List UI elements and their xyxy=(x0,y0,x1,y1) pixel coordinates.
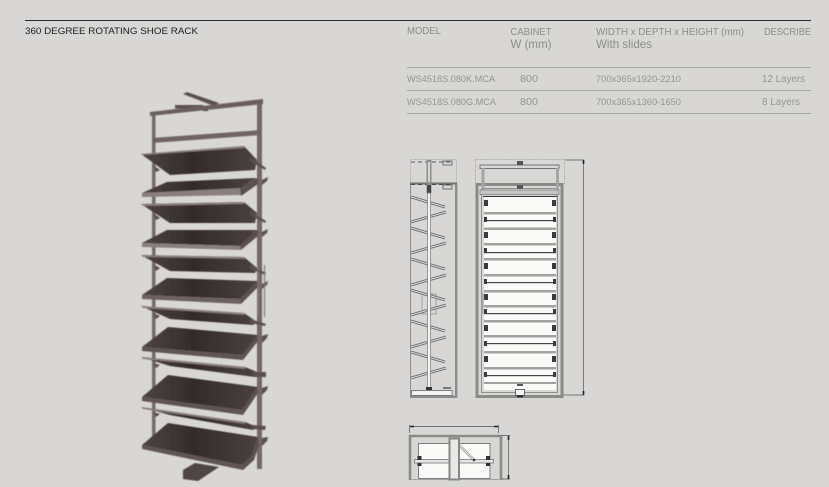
left pole xyxy=(152,113,156,450)
top frame xyxy=(480,161,559,196)
product illustration: rotating shoe rack xyxy=(141,92,268,481)
table row 2 xyxy=(407,97,800,108)
shelf arms xyxy=(411,197,446,378)
shelf 12 xyxy=(142,423,268,470)
table header: MODEL xyxy=(407,26,441,37)
base foot xyxy=(183,463,219,481)
inner shelf xyxy=(418,444,490,478)
shelf 7 xyxy=(141,306,266,326)
right pole xyxy=(257,100,262,469)
table header: W (mm) xyxy=(510,37,552,51)
depth dimension xyxy=(502,436,510,479)
shelf 5 xyxy=(141,255,266,275)
top fittings xyxy=(411,160,452,194)
table row 1 xyxy=(407,74,805,85)
table header: CABINET xyxy=(510,27,552,38)
shelf 2 xyxy=(142,177,268,197)
dotted upper extent xyxy=(410,160,456,184)
table header xyxy=(407,26,811,51)
shelf stack xyxy=(484,197,556,390)
front view drawing xyxy=(476,160,584,398)
shelf 8 xyxy=(142,327,268,360)
shelf 11 xyxy=(141,407,266,430)
table header: DESCRIBE xyxy=(764,27,811,38)
base fitting xyxy=(516,384,524,398)
shelf 9 xyxy=(141,357,266,377)
table row 2: 800 xyxy=(520,97,538,108)
width dimension xyxy=(410,425,498,433)
top bracket xyxy=(175,92,219,111)
table row 1: 700x365x1920-2210 xyxy=(596,74,681,85)
side view drawing xyxy=(410,160,457,398)
table header: With slides xyxy=(596,37,652,51)
shelf 10 xyxy=(142,375,268,415)
top bar xyxy=(150,99,263,116)
specification table xyxy=(407,26,811,114)
dotted upper extent xyxy=(476,160,564,184)
handle xyxy=(258,265,264,317)
second bar xyxy=(152,130,261,143)
cabinet walls xyxy=(477,184,562,396)
base plate xyxy=(412,387,452,396)
table row 1: 800 xyxy=(520,74,538,85)
shelf 6 xyxy=(142,278,268,304)
horizontal arm xyxy=(414,460,494,463)
centre post xyxy=(450,438,459,480)
shelf 4 xyxy=(142,229,268,250)
shelf brackets xyxy=(484,200,556,377)
pivot dots xyxy=(418,456,490,466)
title: 360 DEGREE ROTATING SHOE RACK xyxy=(25,26,199,37)
shelf 1 xyxy=(141,146,266,175)
table row 1: 12 Layers xyxy=(762,74,805,85)
handle outline xyxy=(422,294,436,314)
table row 1: WS4518S.080K.MCA xyxy=(407,74,496,85)
handle xyxy=(482,293,484,314)
cabinet outline xyxy=(410,436,501,480)
top view drawing xyxy=(410,425,510,480)
table header: WIDTH x DEPTH x HEIGHT (mm) xyxy=(596,26,744,38)
height dimension xyxy=(563,160,584,395)
centre pole xyxy=(428,193,430,390)
table row 2: 700x365x1360-1650 xyxy=(596,97,681,108)
table row 2: 8 Layers xyxy=(762,97,800,108)
cabinet outline xyxy=(410,184,456,396)
table row 2: WS4518S.080G.MCA xyxy=(407,97,497,108)
diagonal brace xyxy=(459,445,474,460)
shelf 3 xyxy=(141,202,266,223)
